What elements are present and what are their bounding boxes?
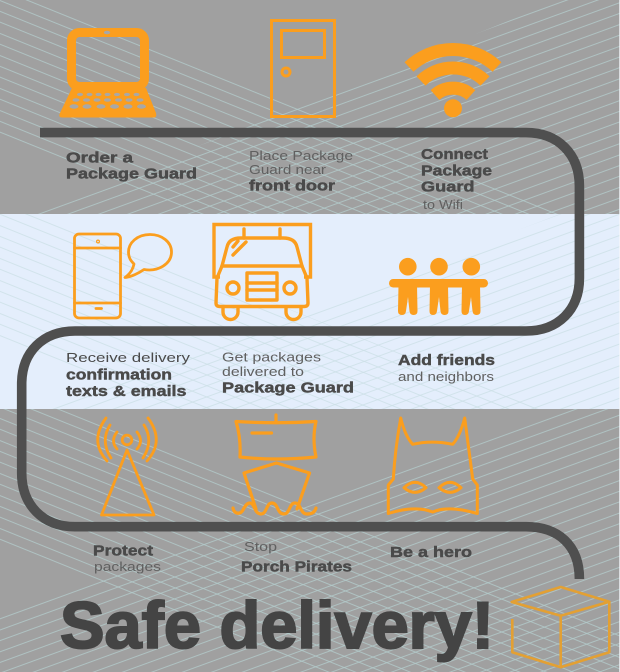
text: connect package guard to wifi: to Wifi (423, 197, 463, 212)
text: add friends and neighbors: Add friends (398, 352, 495, 369)
text: connect package guard to wifi (421, 146, 492, 212)
text: place package guard near front door (249, 148, 353, 194)
text: connect package guard to wifi: Guard (421, 178, 474, 196)
text: order a package guard: Package Guard (66, 166, 197, 182)
text: receive delivery confirmation texts and emails: confirmation (66, 366, 172, 384)
icon: pirate ship (233, 415, 316, 514)
icon: hero mask (388, 418, 477, 514)
icon: package box (512, 587, 609, 667)
text: protect packages: packages (94, 559, 162, 574)
text: add friends and neighbors (398, 352, 495, 384)
text: add friends and neighbors: and neighbors (398, 369, 495, 384)
text: order a package guard: Order a (66, 150, 134, 166)
text: place package guard near front door: Place Package (249, 148, 353, 163)
text: stop porch pirates: Stop (244, 539, 277, 554)
panel: top grey band (0, 0, 620, 214)
text: get packages delivered to package guard: delivered to (222, 364, 304, 379)
text: get packages delivered to package guard: Package Guard (222, 380, 354, 396)
text: connect package guard to wifi: Package (421, 162, 492, 180)
text: be a hero: Be a hero (390, 544, 472, 561)
text: order a package guard (66, 150, 197, 182)
text: receive delivery confirmation texts and emails: Receive delivery (66, 350, 191, 365)
text: place package guard near front door: front door (249, 178, 335, 194)
text: protect packages (93, 542, 162, 574)
icon: three people linked (389, 258, 488, 315)
icon: signal tower (98, 418, 156, 515)
text: receive delivery confirmation texts and emails: texts & emails (66, 383, 186, 400)
text: connect package guard to wifi: Connect (421, 146, 488, 163)
icon: delivery truck (214, 224, 310, 320)
text: place package guard near front door: Guard near (249, 162, 327, 177)
title: safe delivery: Safe delivery! (60, 588, 494, 662)
text: get packages delivered to package guard: Get packages (222, 350, 322, 365)
text: receive delivery confirmation texts and emails (66, 350, 191, 400)
icon: door (272, 20, 334, 116)
text: get packages delivered to package guard (222, 350, 354, 396)
text: stop porch pirates (241, 539, 352, 576)
text: protect packages: Protect (93, 542, 153, 560)
icon: laptop (59, 31, 156, 118)
panel: middle light blue band (0, 214, 620, 409)
icon: wifi (409, 49, 497, 117)
icon: phone with speech bubble (74, 234, 172, 318)
text: stop porch pirates: Porch Pirates (241, 558, 352, 576)
winding delivery path (22, 133, 579, 579)
